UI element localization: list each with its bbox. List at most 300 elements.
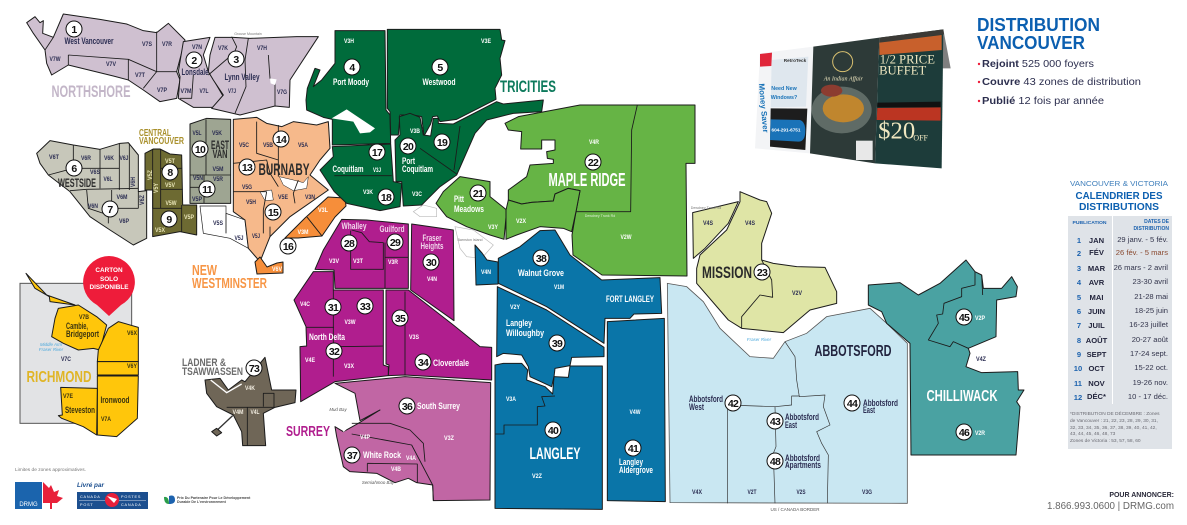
- zone number markers: 40: [548, 425, 559, 437]
- east van labels: VAN: [212, 147, 228, 161]
- abbotsford labels: Fraser River: [747, 337, 772, 342]
- new westminster shapes: [285, 197, 346, 238]
- westside labels: V6K: [104, 155, 114, 162]
- table rows: 1: [1077, 236, 1082, 245]
- surrey labels: Guilford: [380, 224, 405, 235]
- richmond labels: V7C: [61, 356, 71, 363]
- logo: DRMG: [15, 482, 63, 509]
- heading: ladner tsawwassen: LADNER &: [182, 357, 226, 369]
- table rows: 10 - 17 déc.: [1128, 392, 1168, 401]
- surrey labels: South Surrey: [417, 401, 461, 412]
- surrey labels: Cloverdale: [433, 358, 469, 369]
- zone number markers: 38: [536, 253, 547, 265]
- heading: langley: LANGLEY: [530, 444, 581, 463]
- north shore shapes: [27, 14, 318, 115]
- zone number markers: 73: [249, 363, 260, 375]
- richmond labels: [61, 314, 138, 423]
- surrey labels: V4C: [300, 301, 310, 308]
- richmond shapes: [20, 273, 138, 437]
- surrey labels: V4P: [360, 434, 371, 441]
- abbotsford labels: V4X: [692, 489, 703, 496]
- westside labels: V6N: [88, 203, 98, 210]
- richmond labels: V6X: [127, 330, 138, 337]
- east van shapes: [190, 118, 248, 248]
- north shore labels: V7S: [142, 41, 153, 48]
- surrey labels: North Delta: [309, 332, 345, 343]
- north shore labels: V7H: [257, 45, 267, 52]
- langley labels: V4N: [481, 269, 491, 276]
- westside labels: V6L: [104, 176, 113, 183]
- callout: carton solo disponible: [83, 256, 135, 316]
- zone number markers: 19: [437, 137, 448, 149]
- zone number markers: 22: [588, 157, 599, 169]
- callout: carton solo disponible: CARTON: [95, 267, 123, 274]
- heading: tricities: TRICITIES: [500, 77, 556, 96]
- burnaby labels: V5A: [298, 142, 308, 149]
- chilliwack labels: V2R: [975, 430, 985, 437]
- langley shapes: [495, 230, 665, 509]
- zone number markers: 2: [191, 55, 197, 67]
- heading: calendar: VANCOUVER & VICTORIA: [1070, 179, 1169, 188]
- abbotsford labels: V3G: [862, 489, 872, 496]
- tricities labels: [332, 38, 492, 198]
- zone number markers: 3: [233, 54, 239, 66]
- westside labels: V6P: [119, 218, 130, 225]
- westside labels: V6Z: [139, 195, 146, 205]
- chilliwack labels: V2P: [975, 315, 986, 322]
- surrey shapes: [294, 219, 492, 501]
- water label: middle arm: [39, 342, 64, 352]
- east van labels: V5K: [212, 130, 222, 137]
- zone number markers: 11: [202, 184, 213, 196]
- zone number markers: 8: [167, 167, 173, 179]
- heading: calendar: [1070, 179, 1169, 213]
- zone number markers: 34: [418, 357, 429, 369]
- abbotsford labels: East: [863, 405, 875, 415]
- zone number markers: 13: [242, 162, 253, 174]
- text block: key facts: Couvre 43 zones de distribution: [982, 76, 1141, 88]
- langley labels: Aldergrove: [619, 465, 653, 475]
- table rows: MAR: [1088, 264, 1106, 273]
- heading: distribution vancouver: VANCOUVER: [977, 33, 1085, 53]
- tricities labels: V3H: [344, 38, 354, 45]
- table rows: 23-30 avril: [1133, 277, 1168, 286]
- maple ridge labels: V2W: [620, 234, 632, 241]
- panel: burnaby and new westminster: [192, 117, 346, 292]
- table rows: 26 fév. - 5 mars: [1116, 248, 1168, 257]
- maple ridge labels: MAPLE RIDGE: [548, 170, 626, 190]
- chilliwack labels: [975, 315, 986, 437]
- road label: Barnston Island: [458, 238, 482, 242]
- panel: tricities: [306, 29, 556, 211]
- table rows: 10: [1074, 364, 1082, 373]
- north shore labels: [50, 32, 287, 96]
- table rows: AOÛT: [1086, 336, 1108, 345]
- zone number markers: 28: [344, 238, 355, 250]
- callout: carton solo disponible: DISPONIBLE: [89, 284, 129, 291]
- heading: surrey: SURREY: [286, 423, 330, 440]
- table rows: 3: [1077, 264, 1081, 273]
- langley labels: Langley: [506, 318, 533, 329]
- north shore labels: V7V: [106, 61, 117, 68]
- langley labels: V3A: [506, 396, 516, 403]
- north shore labels: Lonsdale: [182, 67, 208, 78]
- north shore labels: V7M: [180, 88, 192, 95]
- central vancouver zone codes: [147, 158, 195, 234]
- surrey labels: [300, 221, 469, 473]
- table header: [1072, 219, 1170, 232]
- heading: mission: MISSION: [702, 263, 752, 282]
- table rows: 19-26 nov.: [1133, 378, 1168, 387]
- zone number markers: 4: [349, 62, 355, 74]
- water label: middle arm: Middle Arm: [40, 342, 62, 347]
- maple ridge labels: [454, 139, 632, 241]
- east van labels: V5R: [213, 176, 223, 183]
- zone number markers: 48: [770, 456, 781, 468]
- heading: chilliwack: CHILLIWACK: [926, 388, 998, 405]
- heading: new westminster: WESTMINSTER: [192, 275, 267, 292]
- central vancouver zone codes: V5Y: [153, 182, 160, 193]
- heading: new westminster: [192, 262, 267, 292]
- westside labels: V6R: [81, 155, 91, 162]
- maple ridge labels: V2X: [516, 218, 527, 225]
- panel: calendar table: [1068, 216, 1172, 449]
- image: money saver flyer mockup: OFF: [913, 134, 929, 143]
- heading: ladner tsawwassen: TSAWWASSEN: [182, 366, 243, 378]
- zone number markers: 43: [770, 416, 781, 428]
- zone number markers: 20: [403, 141, 414, 153]
- zone number markers: 17: [372, 147, 383, 159]
- table rows: 4: [1077, 278, 1082, 287]
- table rows: 8: [1077, 336, 1081, 345]
- contact block: 1.866.993.0600 | DRMG.com: [1047, 501, 1174, 512]
- richmond labels: Bridgeport: [66, 329, 100, 340]
- tricities labels: V3E: [481, 38, 492, 45]
- footnote: [1070, 410, 1160, 444]
- table rows: 5: [1077, 293, 1082, 302]
- zone number markers: 35: [395, 313, 406, 325]
- surrey labels: Whalley: [342, 221, 367, 232]
- east van labels: EAST: [211, 138, 229, 152]
- new westminster zone codes: V3L: [318, 207, 328, 214]
- abbotsford labels: V2T: [748, 489, 757, 496]
- westside labels: V6H: [130, 177, 137, 187]
- surrey labels: V4A: [406, 455, 416, 462]
- langley labels: Langley: [619, 457, 643, 467]
- heading: central vancouver: CENTRAL: [139, 128, 171, 139]
- tricities labels: Coquitlam: [332, 164, 364, 175]
- maple ridge labels: V4R: [589, 139, 599, 146]
- surrey labels: V3S: [409, 334, 420, 341]
- north shore labels: V7W: [50, 56, 61, 63]
- table header: DISTRIBUTION: [1133, 226, 1169, 232]
- burnaby shapes: [233, 117, 330, 262]
- zone number markers: 44: [847, 398, 858, 410]
- image: money saver flyer mockup: RetroTeck: [784, 58, 807, 63]
- heading: ladner tsawwassen: [182, 357, 243, 378]
- surrey labels: V4N: [427, 276, 437, 283]
- zone number markers: 14: [276, 134, 287, 146]
- north shore labels: Grouse Mountain: [234, 32, 262, 36]
- water labels: Mud Bay: [329, 407, 347, 412]
- image: money saver flyer mockup: An Indian Affair: [823, 76, 864, 83]
- water labels: Semiahmoo Bay: [362, 480, 395, 485]
- image: money saver flyer mockup: BUFFET: [879, 64, 926, 78]
- logo: canada post: [77, 482, 148, 509]
- maple ridge labels: Meadows: [454, 204, 484, 215]
- chilliwack labels: V4Z: [976, 356, 986, 363]
- text block: key facts: [978, 58, 1141, 107]
- logo: canada post: CANADA: [121, 503, 142, 507]
- text block: key facts: Rejoint 525 000 foyers: [982, 58, 1094, 70]
- burnaby labels: V5C: [239, 142, 249, 149]
- heading: westside: WESTSIDE: [58, 176, 96, 190]
- tricities labels: Port Moody: [333, 77, 369, 88]
- surrey labels: V3W: [344, 319, 356, 326]
- richmond labels: V7B: [79, 314, 89, 321]
- zone number markers: 31: [328, 302, 339, 314]
- east van labels: V5J: [234, 235, 244, 242]
- water labels: [329, 407, 395, 485]
- richmond labels: V6Y: [127, 363, 138, 370]
- abbotsford labels: Abbotsford: [863, 398, 898, 408]
- heading: distribution vancouver: DISTRIBUTION: [977, 15, 1100, 35]
- tricities labels: Port: [402, 156, 416, 167]
- burnaby labels: [239, 142, 315, 240]
- abbotsford labels: Abbotsford: [785, 453, 820, 463]
- image: money saver flyer mockup: $20: [878, 118, 915, 145]
- north shore labels: V7T: [135, 72, 145, 79]
- zone number markers: 36: [402, 401, 413, 413]
- heading: northshore: NORTHSHORE: [52, 82, 130, 101]
- table rows: 21-28 mai: [1134, 292, 1168, 301]
- abbotsford labels: US / CANADA BORDER: [770, 507, 820, 512]
- chilliwack shapes: [868, 260, 1024, 455]
- maple ridge labels: Pitt: [454, 194, 465, 205]
- table header: PUBLICATION: [1072, 220, 1107, 225]
- mission labels: V4S: [745, 220, 756, 227]
- tricities labels: V3C: [412, 191, 422, 198]
- zone number markers: 29: [390, 237, 401, 249]
- langley labels: V1M: [554, 284, 564, 291]
- surrey labels: V3V: [329, 258, 340, 265]
- text block: key facts: Publié 12 fois par année: [982, 95, 1104, 107]
- logo: environmental award: Prix Du Partenaire Pour Le Développement: [177, 496, 251, 500]
- surrey labels: V3R: [388, 259, 398, 266]
- zone number markers: 1: [71, 24, 77, 36]
- langley labels: V4W: [630, 409, 641, 416]
- zone number markers: 45: [959, 312, 970, 324]
- east van labels: V5L: [192, 130, 202, 137]
- table rows: 29 janv. - 5 fév.: [1117, 235, 1168, 244]
- table rows: SEPT: [1087, 350, 1107, 359]
- north shore labels: V7K: [218, 45, 228, 52]
- central vancouver zone codes: V5T: [165, 158, 175, 165]
- ladner zone codes: V4L: [250, 409, 260, 416]
- north shore labels: V7P: [157, 87, 168, 94]
- westside labels: V6M: [116, 194, 128, 201]
- tricities labels: Coquitlam: [402, 164, 433, 175]
- burnaby labels: V5H: [246, 199, 256, 206]
- footnote: 32, 33, 34, 35, 36, 37, 38, 39, 40, 41, 42,: [1070, 425, 1157, 431]
- image: money saver flyer mockup: 1/2 PRICE: [880, 52, 935, 66]
- table rows: 12: [1074, 393, 1082, 402]
- table rows: OCT: [1088, 364, 1105, 373]
- table rows: NOV: [1088, 379, 1106, 388]
- panel: langley: [475, 230, 665, 509]
- burnaby labels: V5J: [252, 233, 260, 240]
- richmond labels: Cambie,: [66, 321, 88, 332]
- note: approximate limits: Limites de zones approximatives.: [15, 467, 86, 473]
- zone number markers: 9: [166, 214, 172, 226]
- surrey labels: White Rock: [363, 450, 402, 461]
- abbotsford labels: Abbotsford: [689, 394, 723, 404]
- east van labels: [192, 130, 244, 242]
- new westminster zone codes: V3M: [298, 229, 308, 236]
- north shore labels: V7L: [200, 88, 209, 95]
- table rows: 18-25 juin: [1135, 306, 1168, 315]
- table rows: DÉC*: [1087, 392, 1106, 401]
- V4N shape: [475, 245, 498, 285]
- heading: distribution vancouver: [977, 15, 1100, 53]
- tricities shapes: [306, 29, 543, 211]
- table rows: 11: [1074, 379, 1083, 388]
- central vancouver zone codes: V5V: [165, 182, 176, 189]
- tricities labels: Westwood: [422, 77, 456, 88]
- central vancouver shapes: [145, 149, 197, 237]
- heading: richmond: RICHMOND: [26, 369, 92, 386]
- langley labels: FORT LANGLEY: [606, 294, 654, 305]
- surrey labels: V3Z: [444, 435, 454, 442]
- surrey labels: V4B: [391, 466, 401, 473]
- heading: abbotsford: ABBOTSFORD: [814, 343, 892, 360]
- central vancouver zone codes: V5Z: [147, 170, 154, 180]
- north shore labels: West Vancouver: [64, 36, 114, 47]
- zone number markers: 46: [959, 427, 970, 439]
- surrey labels: V3T: [353, 258, 363, 265]
- langley labels: Willoughby: [506, 328, 545, 339]
- zone number markers: 23: [757, 267, 768, 279]
- table rows: [1074, 235, 1169, 402]
- burnaby labels: V5G: [242, 184, 252, 191]
- central vancouver zone codes: V5W: [166, 200, 177, 207]
- zone number markers: 6: [71, 163, 77, 175]
- abbotsford labels: [689, 337, 898, 512]
- surrey labels: V3X: [344, 363, 355, 370]
- table rows: 9: [1077, 350, 1081, 359]
- mission labels: V4S: [703, 220, 714, 227]
- table rows: 20-27 août: [1132, 335, 1169, 344]
- logo: canada post: Livré par: [77, 482, 105, 489]
- ladner shapes: [205, 357, 296, 446]
- zone number markers: 37: [347, 450, 358, 462]
- ladner zone codes: [232, 385, 260, 416]
- abbotsford labels: Apartments: [785, 460, 821, 470]
- table rows: MAI: [1090, 293, 1103, 302]
- logo: canada post: CANADA: [80, 495, 101, 499]
- mission shapes: [693, 192, 837, 333]
- logo: canada post: POST: [80, 503, 94, 507]
- surrey labels: Heights: [420, 241, 444, 252]
- mission labels: [691, 206, 803, 297]
- richmond labels: V7E: [63, 393, 74, 400]
- water label: middle arm: Fraser River: [39, 347, 64, 352]
- north shore labels: V7N: [192, 44, 202, 51]
- logo: environmental award: [164, 496, 251, 504]
- zone number markers: 33: [360, 301, 371, 313]
- table header: DATES DE: [1144, 219, 1170, 225]
- westside labels: [49, 154, 146, 225]
- central vancouver zone codes: V5P: [184, 214, 195, 221]
- panel: east van: [190, 118, 248, 248]
- footnote: de Vancouver : 21, 22, 23, 28, 29, 30, 31,: [1070, 418, 1158, 424]
- zone number markers: 21: [473, 188, 484, 200]
- image: money saver flyer mockup: Need New: [771, 86, 798, 92]
- zone number markers: 39: [552, 338, 563, 350]
- panel: westside: [37, 141, 147, 245]
- burnaby labels: V5E: [278, 194, 289, 201]
- logo: environmental award: Durable De L'environnement: [177, 500, 227, 504]
- heading: burnaby: BURNABY: [258, 160, 310, 179]
- footnote: *DISTRIBUTION DE DÉCEMBRE : Zones: [1070, 410, 1160, 417]
- abbotsford labels: V2S: [796, 489, 806, 496]
- maple ridge labels: Dewdney Trunk Rd: [585, 214, 615, 218]
- north shore labels: V7R: [162, 41, 172, 48]
- table rows: 26 mars - 2 avril: [1114, 263, 1168, 272]
- zone number markers: 15: [268, 207, 279, 219]
- zone number markers: 10: [195, 144, 206, 156]
- zone number markers: 5: [437, 62, 443, 74]
- east van labels: V5P: [192, 196, 203, 203]
- north shore labels: Lynn Valley: [224, 72, 260, 83]
- panel: surrey: [286, 219, 492, 501]
- burnaby labels: V3N: [305, 194, 315, 201]
- abbotsford labels: Abbotsford: [785, 412, 819, 422]
- panel: richmond: [20, 256, 138, 437]
- image: money saver flyer mockup: 604-291-6751: [771, 128, 801, 133]
- maple ridge labels: V3Y: [488, 224, 499, 231]
- westside shapes: [37, 141, 147, 245]
- tricities labels: V3B: [410, 128, 420, 135]
- new westminster zone codes: [272, 207, 328, 273]
- tricities labels: V3J: [373, 167, 381, 174]
- panel: maple ridge: [413, 105, 695, 276]
- zone number markers: [66, 21, 972, 469]
- ladner zone codes: V4K: [245, 385, 255, 392]
- langley labels: V2Z: [532, 473, 542, 480]
- image: money saver flyer mockup: Money Saver: [757, 83, 770, 133]
- heading: calendar: DISTRIBUTIONS: [1079, 202, 1159, 213]
- footnote: Zones de Victoria : 53, 57, 58, 60: [1070, 438, 1141, 444]
- abbotsford labels: East: [785, 420, 797, 430]
- table rows: AVR: [1089, 278, 1105, 287]
- table rows: JUIL: [1088, 321, 1105, 330]
- surrey labels: Fraser: [422, 233, 442, 244]
- logo: canada post: POSTES: [121, 495, 141, 499]
- table rows: 16-23 juillet: [1129, 320, 1169, 329]
- logo: DRMG: DRMG: [19, 502, 38, 508]
- panel: ladner and tsawwassen: [182, 357, 296, 446]
- image: money saver flyer mockup: [755, 29, 951, 168]
- tricities labels: V3K: [363, 189, 373, 196]
- zone number markers: 42: [728, 398, 739, 410]
- westside labels: V6T: [49, 154, 59, 161]
- richmond labels: V7A: [101, 416, 111, 423]
- zone number markers: 30: [426, 257, 437, 269]
- langley labels: Walnut Grove: [518, 268, 564, 279]
- surrey labels: V4E: [305, 357, 316, 364]
- contact block: [1047, 492, 1174, 512]
